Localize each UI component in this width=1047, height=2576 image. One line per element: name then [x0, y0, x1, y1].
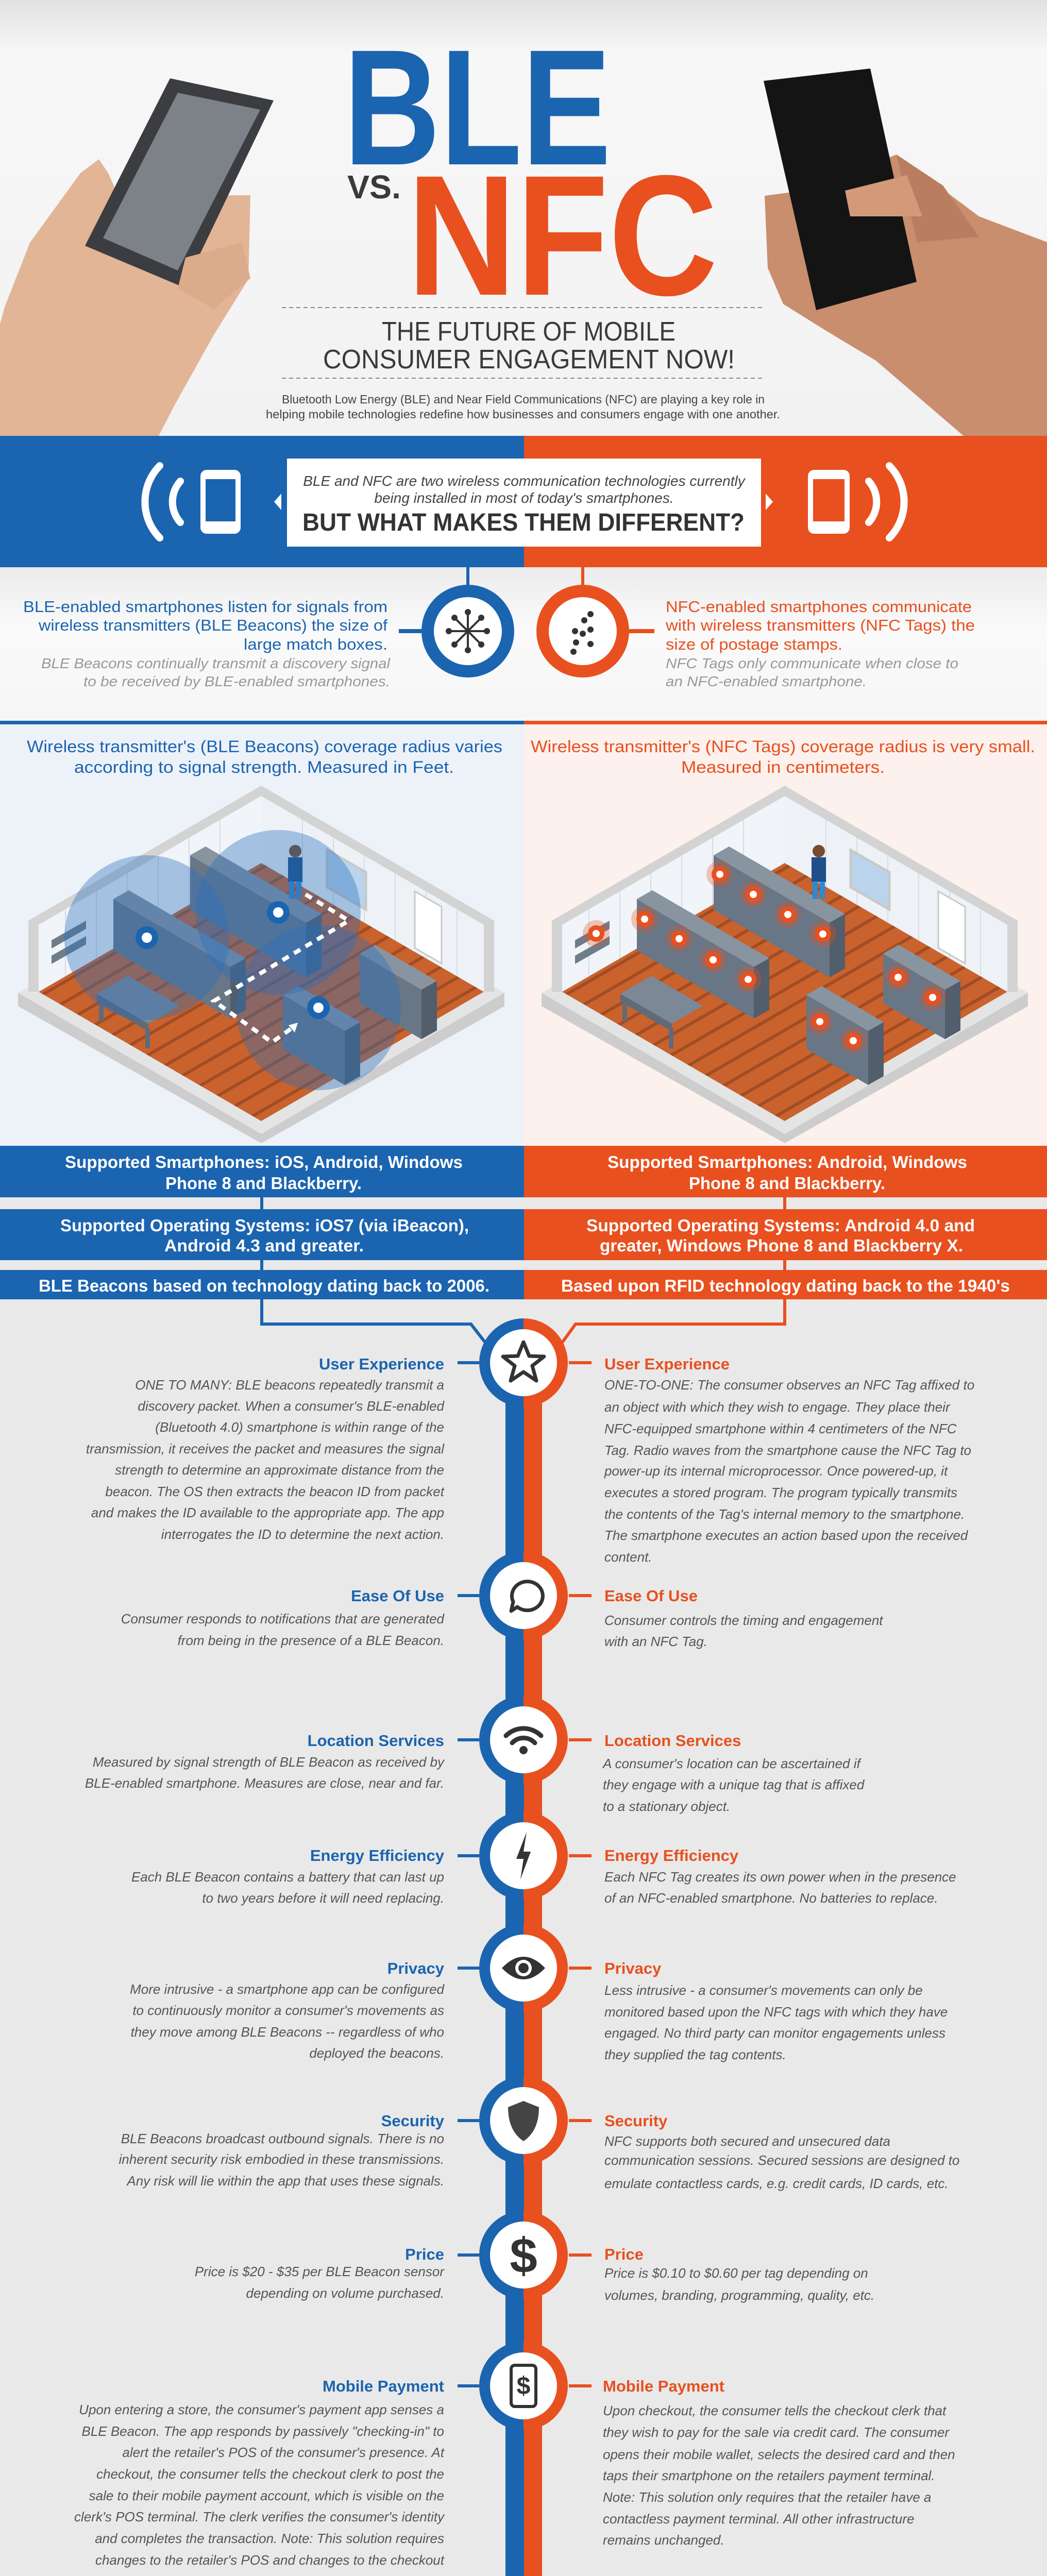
feature: Energy Efficiency: Each BLE Beacon contains a battery that can last up: [131, 1869, 444, 1885]
feature: User Experience: Tag. Radio waves from the smartphone cause the NFC Tag to: [604, 1443, 971, 1458]
feature: User Experience: power-up its internal microprocessor. Once powered-up, it: [604, 1463, 949, 1479]
feature: Location Services: they engage with a unique tag that is affixed: [603, 1777, 865, 1792]
hero background: [0, 0, 1047, 436]
feature: Mobile Payment: contactless payment terminal. All other infrastructure: [603, 2511, 915, 2527]
intro text: Bluetooth Low Energy (BLE) and Near Field Communications (NFC) are playing a key role in: [282, 393, 765, 406]
text: NFC device size: [665, 598, 975, 689]
text: NFC device size: size of postage stamps.: [666, 635, 842, 653]
feature: Privacy: [130, 1924, 948, 2062]
feature: User Experience: The smartphone executes an action based upon the received: [604, 1528, 969, 1543]
band: supported smartphones: [0, 1146, 1047, 1197]
feature: Mobile Payment: checkout, the consumer tells the checkout clerk to post the: [96, 2466, 444, 2482]
feature: User Experience: executes a stored program. The program typically transmits: [604, 1485, 957, 1500]
callout box: question: BLE and NFC are two wireless communication technologies currently: [303, 473, 746, 489]
feature: Privacy: engaged. No third party can monitor engagements unless: [604, 2025, 945, 2041]
feature: User Experience: discovery packet. When a consumer's BLE-enabled: [138, 1398, 445, 1414]
feature: User Experience: an object with which they wish to engage. They place their: [604, 1399, 951, 1415]
callout box: question: BUT WHAT MAKES THEM DIFFERENT?: [302, 509, 745, 536]
band: supported smartphones: Supported Smartphones: iOS, Android, Windows: [65, 1153, 463, 1172]
feature: Security: inherent security risk embodied in these transmissions.: [119, 2151, 444, 2167]
icon: wifi: [479, 1696, 568, 1784]
feature: User Experience: ONE TO MANY: BLE beacons repeatedly transmit a: [135, 1377, 444, 1393]
feature: Location Services: Measured by signal strength of BLE Beacon as received by: [93, 1754, 445, 1770]
feature: Privacy: to continuously monitor a consumer's movements as: [132, 2003, 444, 2018]
feature: Price: volumes, branding, programming, quality, etc.: [604, 2287, 874, 2303]
intro text: [266, 393, 780, 421]
feature: Price: Price is $0.10 to $0.60 per tag depending on: [604, 2265, 868, 2281]
feature: User Experience: (Bluetooth 4.0) smartphone is within range of the: [155, 1419, 444, 1435]
hero: left hand with phone: [0, 78, 274, 436]
feature: Privacy: Privacy: [387, 1959, 445, 1977]
feature: User Experience: beacon. The OS then extracts the beacon ID from packet: [105, 1484, 445, 1499]
feature: User Experience: [86, 1318, 974, 1565]
feature: Privacy: deployed the beacons.: [309, 2045, 444, 2061]
callout box: question: [287, 459, 761, 547]
icon: dollar: $: [510, 2228, 537, 2283]
icon: speech bubble: [479, 1551, 568, 1640]
heading: NFC coverage: Wireless transmitter's (NFC Tags) coverage radius is very small.: [531, 737, 1035, 756]
feature: User Experience: transmission, it receives the packet and measures the signal: [86, 1441, 445, 1456]
text: NFC device size: NFC-enabled smartphones communicate: [666, 598, 972, 616]
icon: BLE phone with waves: [145, 466, 241, 538]
feature: Mobile Payment: taps their smartphone on the retailers payment terminal.: [603, 2468, 935, 2483]
feature: User Experience: content.: [604, 1549, 652, 1565]
feature: User Experience: NFC-equipped smartphone within 4 centimeters of the NFC: [604, 1421, 957, 1436]
icon: NFC tag: [536, 585, 629, 677]
title: BLE vs. NFC: VS.: [347, 168, 401, 206]
feature: Location Services: [85, 1696, 865, 1814]
feature: Mobile Payment: BLE Beacon. The app responds by passively "checking-in" to: [81, 2424, 444, 2439]
feature: Privacy: More intrusive - a smartphone app can be configured: [130, 1981, 445, 1997]
feature: Location Services: Location Services: [308, 1732, 444, 1750]
feature: Security: [119, 2076, 959, 2191]
feature: Mobile Payment: Mobile Payment: [603, 2377, 724, 2395]
feature: Mobile Payment: Note: This solution only requires that the retailer have a: [603, 2489, 931, 2505]
feature: Mobile Payment: opens their mobile wallet, selects the desired card and then: [603, 2447, 955, 2462]
feature: User Experience: User Experience: [604, 1355, 730, 1373]
panel: coverage NFC: [524, 721, 1047, 1146]
feature: Mobile Payment: clerk's POS terminal. The clerk verifies the consumer's identity: [74, 2509, 445, 2524]
text: NFC device size: an NFC-enabled smartphone.: [666, 673, 867, 689]
feature: User Experience: and makes the ID available to the appropriate app. The app: [91, 1505, 444, 1520]
feature: Privacy: Less intrusive - a consumer's movements can only be: [604, 1982, 923, 1998]
band: supported OS: [0, 1209, 1047, 1260]
heading: NFC coverage: Measured in centimeters.: [681, 758, 885, 776]
feature: Energy Efficiency: Energy Efficiency: [604, 1846, 739, 1865]
icon: star: [479, 1318, 568, 1407]
feature: Location Services: BLE-enabled smartphone. Measures are close, near and far.: [85, 1775, 444, 1791]
icon: lightning: [479, 1811, 568, 1900]
feature: User Experience: ONE-TO-ONE: The consumer observes an NFC Tag affixed to: [604, 1377, 974, 1393]
band: supported OS: Android 4.3 and greater.: [164, 1236, 364, 1255]
feature: Price: [195, 2211, 874, 2303]
band: supported smartphones: Supported Smartphones: Android, Windows: [607, 1153, 967, 1172]
feature: Location Services: A consumer's location can be ascertained if: [602, 1756, 862, 1771]
title: BLE vs. NFC: BLE: [344, 15, 611, 199]
text: NFC device size: NFC Tags only communicate when close to: [666, 655, 958, 671]
feature: Price: depending on volume purchased.: [246, 2285, 444, 2301]
band: technology age: Based upon RFID technology dating back to the 1940's: [561, 1276, 1010, 1295]
callout box: question: being installed in most of today's smartphones.: [374, 490, 674, 506]
feature: Mobile Payment: changes to the retailer's POS and changes to the checkout: [95, 2552, 445, 2568]
band: technology age: BLE Beacons based on technology dating back to 2006.: [39, 1276, 489, 1295]
panel: device size comparison: [0, 567, 1047, 722]
band: supported smartphones: Phone 8 and Blackberry.: [165, 1174, 362, 1193]
feature: Location Services: to a stationary object.: [603, 1799, 730, 1814]
feature: Privacy: monitored based upon the NFC tags with which they have: [604, 2004, 948, 2020]
feature: Mobile Payment: remains unchanged.: [603, 2532, 724, 2548]
feature: Ease Of Use: Ease Of Use: [351, 1587, 444, 1605]
feature: Energy Efficiency: [131, 1811, 956, 1906]
text: BLE device size: BLE-enabled smartphones listen for signals from: [23, 598, 387, 616]
feature: Ease Of Use: Ease Of Use: [604, 1587, 698, 1605]
feature: User Experience: the contents of the Tag's internal memory to the smartphone.: [604, 1506, 965, 1522]
text: BLE device size: large match boxes.: [244, 635, 387, 653]
feature: Mobile Payment: [74, 2342, 955, 2576]
subtitle: THE FUTURE OF MOBILE: [382, 317, 676, 347]
feature: Ease Of Use: from being in the presence of a BLE Beacon.: [178, 1633, 444, 1648]
feature: Security: Any risk will lie within the app that uses these signals.: [126, 2173, 444, 2189]
heading: NFC coverage: [531, 737, 1035, 776]
intro text: helping mobile technologies redefine how businesses and consumers engage with one another.: [266, 408, 780, 421]
feature: Security: NFC supports both secured and unsecured data: [604, 2133, 890, 2149]
feature: User Experience: User Experience: [319, 1355, 444, 1373]
band: technology age: [0, 1270, 1047, 1299]
feature: Privacy: they supplied the tag contents.: [604, 2047, 786, 2062]
feature: Ease Of Use: [121, 1551, 884, 1649]
feature: Ease Of Use: Consumer controls the timing and engagement: [604, 1613, 884, 1628]
icon: NFC phone with waves: [808, 466, 904, 538]
feature: Price: Price: [604, 2245, 644, 2263]
illustration: BLE store room: [18, 786, 504, 1143]
band: what makes them different: [0, 436, 1047, 567]
feature: Mobile Payment: alert the retailer's POS of the consumer's presence. At: [122, 2445, 445, 2460]
feature: Energy Efficiency: to two years before it will need replacing.: [202, 1890, 444, 1906]
feature: Ease Of Use: with an NFC Tag.: [604, 1634, 707, 1649]
feature: Location Services: Location Services: [604, 1732, 741, 1750]
feature: Mobile Payment: Mobile Payment: [323, 2377, 444, 2395]
feature: Energy Efficiency: Energy Efficiency: [310, 1846, 445, 1865]
text: BLE device size: [23, 598, 391, 689]
timeline column: [505, 1363, 542, 2576]
feature: Price: Price is $20 - $35 per BLE Beacon sensor: [195, 2264, 445, 2279]
connector lines into timeline: [262, 1299, 785, 1345]
title: BLE vs. NFC: NFC: [407, 140, 718, 331]
feature: Security: communication sessions. Secured sessions are designed to: [604, 2153, 959, 2168]
icon: shield: [479, 2076, 568, 2165]
icon: phone with dollar: [479, 2342, 568, 2430]
feature: User Experience: interrogates the ID to determine the next action.: [161, 1527, 444, 1542]
icon: dollar: [479, 2211, 568, 2299]
feature: Mobile Payment: they wish to pay for the sale via credit card. The consumer: [603, 2425, 950, 2440]
text: BLE device size: wireless transmitters (BLE Beacons) the size of: [38, 616, 387, 634]
band: supported smartphones: Phone 8 and Blackberry.: [689, 1174, 885, 1193]
feature: Privacy: they move among BLE Beacons -- regardless of who: [131, 2024, 444, 2040]
heading: BLE coverage: Wireless transmitter's (BLE Beacons) coverage radius varies: [27, 737, 502, 756]
feature: Security: BLE Beacons broadcast outbound signals. There is no: [121, 2131, 444, 2146]
text: BLE device size: BLE Beacons continually transmit a discovery signal: [41, 655, 391, 671]
feature: Mobile Payment: sale to their mobile payment account, which is visible on the: [89, 2488, 444, 2503]
subtitle: CONSUMER ENGAGEMENT NOW!: [323, 345, 735, 375]
text: NFC device size: with wireless transmitters (NFC Tags) the: [665, 616, 975, 634]
feature: Security: emulate contactless cards, e.g. credit cards, ID cards, etc.: [604, 2176, 949, 2191]
title: BLE vs. NFC: [344, 15, 718, 331]
feature: Privacy: Privacy: [604, 1959, 662, 1977]
features background: [0, 1146, 1047, 2576]
subtitle: [323, 317, 735, 375]
heading: BLE coverage: [27, 737, 502, 776]
band: supported OS: Supported Operating Systems: iOS7 (via iBeacon),: [60, 1216, 469, 1235]
feature: Energy Efficiency: Each NFC Tag creates its own power when in the presence: [604, 1869, 956, 1885]
feature: User Experience: strength to determine an approximate distance from the: [115, 1462, 444, 1478]
feature: Mobile Payment: and completes the transaction. Note: This solution requires: [95, 2531, 444, 2546]
band: supported OS: Supported Operating Systems: Android 4.0 and: [586, 1216, 975, 1235]
icon: phone with dollar: $: [517, 2372, 531, 2400]
feature: Mobile Payment: Upon entering a store, the consumer's payment app senses a: [79, 2402, 444, 2417]
feature: Energy Efficiency: of an NFC-enabled smartphone. No batteries to replace.: [604, 1890, 938, 1906]
illustration: NFC store room: [542, 786, 1028, 1143]
band: supported OS: greater, Windows Phone 8 and Blackberry X.: [600, 1236, 963, 1255]
feature: Ease Of Use: Consumer responds to notifications that are generated: [121, 1611, 445, 1626]
feature: Price: Price: [405, 2245, 444, 2263]
feature: Mobile Payment: Upon checkout, the consumer tells the checkout clerk that: [603, 2403, 947, 2418]
panel: coverage BLE: [0, 721, 524, 1146]
icon: BLE beacon: [421, 585, 514, 677]
hero: right hand with phone: [764, 69, 1047, 436]
heading: BLE coverage: according to signal strength. Measured in Feet.: [74, 758, 454, 776]
text: BLE device size: to be received by BLE-enabled smartphones.: [83, 673, 390, 689]
feature: Security: Security: [604, 2112, 668, 2130]
icon: eye: [479, 1924, 568, 2012]
feature: Security: Security: [381, 2112, 445, 2130]
